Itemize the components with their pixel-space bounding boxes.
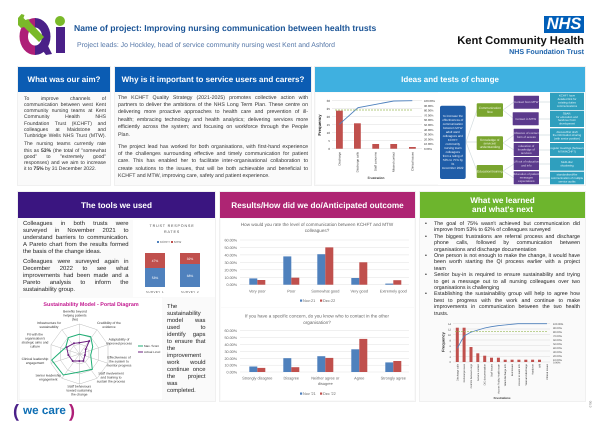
- pareto chart: second survey frustrations: Frequency: [440, 331, 446, 352]
- driver: aim box: effectiveness of: [442, 118, 463, 122]
- pareto chart: first survey frustrations: 30.00%: [424, 133, 434, 137]
- text: tools: improvements had been made and a: [23, 273, 128, 279]
- pareto chart: second survey frustrations: 0: [450, 361, 452, 364]
- text: sustainability: to ensure that: [167, 338, 206, 344]
- bar chart: rating of communication: 60.00%: [224, 238, 238, 242]
- heading: why important: [115, 67, 311, 92]
- pareto chart: second survey frustrations: 12: [448, 328, 452, 332]
- driver: primary drivers: Knowledge of: [480, 138, 500, 142]
- bar chart: rating of communication: 30.00%: [224, 261, 238, 265]
- radar chart: sustainability model: Senior leadership: [35, 374, 61, 378]
- bar chart: rating of communication: Somewhat good: [311, 288, 339, 294]
- radar chart: sustainability model: the change: [71, 392, 88, 396]
- text: learning bullets: The goal of 75% wasn't achieved but communication did: [434, 221, 580, 227]
- pareto chart: second survey frustrations: Wait and discharge: [525, 363, 528, 385]
- driver: change ideas: development: [559, 122, 575, 126]
- driver: aim box: KCHFT: [448, 138, 458, 142]
- pareto chart: first survey frustrations: 10: [327, 131, 330, 135]
- bar chart: rating of communication: 0.00%: [227, 283, 238, 287]
- pareto chart: second survey frustrations: Discharge calls: [456, 363, 459, 381]
- pareto chart: second survey frustrations: 30.00%: [553, 351, 562, 354]
- text: sustainability: the project: [167, 374, 206, 380]
- pareto chart: first survey frustrations: 50.00%: [424, 123, 434, 127]
- text: aim: Tunbridge Wells NHS Trust (MTW).: [24, 133, 106, 139]
- text: aim: The nursing teams currently rate: [24, 141, 106, 147]
- right bracket: ): [69, 401, 75, 421]
- NHS lozenge: NHS: [547, 15, 581, 33]
- pareto chart: first survey frustrations: 0: [328, 147, 330, 151]
- driver: secondary drivers: services: [521, 151, 532, 155]
- text: aim: it to 75% by 31 December 2022.: [24, 166, 96, 172]
- driver: aim box: December 2022: [442, 166, 464, 170]
- bar chart: rating of communication: Extremely good: [380, 288, 407, 294]
- radar chart: sustainability model: (Ns): [72, 318, 78, 322]
- bar chart: who to contact: Agree: [354, 376, 364, 380]
- pareto chart: first survey frustrations: Discharge calls: [355, 152, 359, 172]
- radar chart: sustainability model: monitor progress: [107, 364, 132, 368]
- radar chart: sustainability model: Infrastructure for: [37, 321, 62, 325]
- logo: QI: [18, 14, 65, 55]
- bar chart: rating of communication: 50.00%: [224, 246, 238, 250]
- pareto chart: first survey frustrations: 15: [327, 123, 330, 127]
- text: why important: health; embracing technology and health analytics; delivering services more: [118, 117, 308, 123]
- pareto chart: second survey frustrations: 2: [450, 356, 452, 359]
- pareto chart: first survey frustrations: 100.00%: [424, 99, 436, 103]
- driver: secondary drivers: form of access: [517, 135, 536, 139]
- radar chart: sustainability model: sustainability: [40, 325, 59, 329]
- pareto chart: first survey frustrations: 5: [328, 139, 330, 143]
- radar chart: sustainability model: Credibility of the: [97, 321, 121, 325]
- stacked bar chart: trust response rates: SURVEY 2: [181, 290, 199, 294]
- heading: what we learned: [420, 192, 585, 218]
- text: sustainability: improvement: [167, 352, 201, 358]
- pareto chart: second survey frustrations: Clinical issues: [546, 363, 549, 380]
- text: sustainability: completed.: [167, 388, 196, 394]
- pareto chart: second survey frustrations: Staff issues: [490, 363, 494, 377]
- radar chart: sustainability model: Fit with the: [27, 332, 43, 336]
- text: why important: [118, 95, 308, 179]
- text: sustainability: the: [167, 346, 175, 352]
- driver: aim box: adult ward: [446, 130, 460, 134]
- title: Name of project: Improving nursing communication between health trusts: [74, 23, 376, 33]
- bar chart: who to contact: 10.00%: [224, 364, 238, 368]
- pareto chart: second survey frustrations: Handover: [532, 364, 535, 375]
- radar chart: sustainability model: Actual Level: [144, 350, 161, 354]
- text: tools: sustainability group.: [23, 287, 75, 293]
- text: learning bullets: best to progress with the work and continue to make: [434, 298, 580, 304]
- bar chart: rating of communication: Nov-21: [303, 299, 315, 303]
- text: tools: Colleagues were surveyed again in: [23, 259, 128, 265]
- bar chart: who to contact: 60.00%: [224, 329, 238, 333]
- driver: aim box: To increase the: [443, 114, 463, 118]
- text: learning bullets: organisations and discharge documentation: [434, 247, 536, 253]
- pareto chart: second survey frustrations: 100.00%: [553, 323, 564, 326]
- pareto chart: first survey frustrations: Clinical issues: [410, 152, 414, 171]
- text: sustainability: The: [167, 304, 177, 310]
- text: learning bullets: been worth starting the QI process earlier with a project: [434, 259, 580, 265]
- pareto chart: second survey frustrations: 70.00%: [553, 335, 562, 338]
- project leads: Project leads: Jo Hockley, head of service community nursing west Kent and Ashford: [77, 42, 335, 49]
- radar chart: sustainability model: Staff behaviours: [67, 384, 92, 388]
- we care wordmark: we care: [23, 404, 66, 417]
- driver: change ideas: standardised/the: [557, 172, 578, 176]
- driver: change ideas: the information sharing: [553, 133, 582, 137]
- text: why important: delivering more proactive approaches to health care and prevention of ill-: [118, 109, 308, 115]
- driver: change ideas: SBAR:: [563, 112, 571, 116]
- driver: change ideas: [550, 93, 584, 184]
- driver: secondary drivers: messages: [520, 176, 533, 180]
- pareto chart: second survey frustrations: 10: [448, 334, 452, 337]
- driver: primary drivers: Education/training: [477, 170, 503, 174]
- text: aim: responses) and we aim to increase: [24, 160, 106, 166]
- pareto chart: second survey frustrations: 50.00%: [553, 343, 562, 346]
- bar chart: who to contact: 40.00%: [224, 343, 238, 347]
- heading: tools: The tools we used: [81, 200, 152, 210]
- pareto chart: second survey frustrations: 80.00%: [553, 331, 562, 334]
- NHS logo: [457, 15, 584, 56]
- radar chart: sustainability model: and training to: [101, 376, 122, 380]
- text: sustainability: identify gaps: [167, 332, 206, 338]
- pareto chart: second survey frustrations: 0.00%: [553, 362, 561, 364]
- text: why important: The KCHFT Quality Strategy (2021-2025) promotes collective action with: [118, 95, 308, 101]
- bar chart: who to contact: Nov '21: [303, 392, 316, 396]
- text: why important: efficiently across the system; and focusing on workforce through the People: [118, 124, 308, 130]
- driver: secondary drivers: expectations: [518, 179, 535, 183]
- pareto chart: second survey frustrations: Referral process: [463, 363, 466, 382]
- bar chart: who to contact: If you have a specific concern, do you know who to contact in the other: [245, 314, 389, 318]
- driver: change ideas: KCHFT have: [559, 94, 575, 98]
- radar chart: sustainability model: Staff involvement: [98, 372, 124, 376]
- text: aim: this as 53% (the total of "somewhat: [24, 148, 106, 154]
- pareto chart: first survey frustrations: [317, 99, 436, 180]
- text: why important: The project lead has worked for both organisations, with first-hand experience: [118, 144, 308, 150]
- text: aim: Community Health NHS: [24, 114, 106, 120]
- stacked bar chart: trust response rates: SURVEY 1: [146, 290, 164, 294]
- driver: aim box: [440, 106, 466, 179]
- stacked bar chart: trust response rates: MTW: [174, 240, 181, 244]
- pareto chart: second survey frustrations: 8: [450, 340, 452, 342]
- driver: aim box: nursing team: [444, 146, 462, 150]
- driver: change ideas: handover form: [558, 118, 577, 122]
- text: tools: Pareto analysis to inform the: [23, 280, 128, 286]
- bar chart: who to contact: 50.00%: [224, 336, 238, 340]
- radar chart: sustainability model: evidence: [102, 325, 116, 329]
- radar chart: sustainability model: improved process: [106, 342, 132, 346]
- text: learning bullets: improvements in communication between the two health: [434, 304, 580, 310]
- pareto chart: second survey frustrations: Access Frailty Health team: [497, 364, 500, 394]
- pareto chart: second survey frustrations: Access to team info: [518, 363, 521, 386]
- pareto chart: first survey frustrations: Frustration: [368, 176, 384, 180]
- pareto chart: second survey frustrations: Comms between orgs: [470, 363, 473, 388]
- pareto chart: second survey frustrations: Frustrations: [494, 396, 511, 400]
- stacked bar chart: trust response rates: 53%: [152, 276, 158, 280]
- text: learning bullets: The biggest frustrations are referral process and discharge: [434, 234, 580, 240]
- driver: primary drivers: Communication: [479, 106, 501, 110]
- pareto chart: second survey frustrations: 4: [450, 350, 452, 354]
- driver: change ideas: service audits: [558, 180, 576, 184]
- stacked bar chart: trust response rates: TRUST RESPONSE: [150, 224, 194, 228]
- driver: secondary drivers: Absence of contact: [514, 131, 539, 135]
- pareto chart: first survey frustrations: 20: [327, 115, 330, 119]
- panel: results: [220, 192, 415, 401]
- driver: aim box: community: [446, 142, 461, 146]
- pareto chart: second survey frustrations: Service contact: [477, 364, 480, 381]
- pareto chart: second survey frustrations: 10.00%: [553, 359, 562, 362]
- bar chart: who to contact: disagree: [318, 381, 333, 386]
- driver: change ideas: (with senior position): [554, 136, 580, 140]
- text: learning bullets: team: [434, 266, 446, 272]
- document reference: 0700: [588, 401, 592, 407]
- driver: change ideas: Multi-disc: [561, 160, 574, 164]
- text: learning bullets: to get a message out to all nursing colleagues over two: [434, 279, 580, 285]
- radar chart: sustainability model: organisation's: [25, 336, 45, 340]
- stacked bar chart: trust response rates: 68%: [187, 274, 193, 278]
- heading: what we learned: and what's next: [472, 205, 533, 214]
- panel: tools we used: [18, 192, 215, 401]
- text: aim: Foundation Trust (KCHFT) and: [24, 121, 106, 127]
- driver: secondary drivers: Lift out of education: [514, 160, 539, 164]
- pareto chart: second survey frustrations: Bed issues: [511, 363, 514, 376]
- text: why important: KCHFT and MTW, improving care, safety and patient experience.: [118, 173, 270, 179]
- bar chart: who to contact: 0.00%: [227, 370, 238, 374]
- left bracket: (: [13, 401, 19, 421]
- heading: results: [220, 192, 415, 218]
- we care logo: [13, 401, 75, 421]
- panel: aim: [18, 67, 110, 185]
- pareto chart: first survey frustrations: 70.00%: [424, 113, 434, 117]
- pareto chart: first survey frustrations: Discharge: [337, 152, 341, 166]
- driver: secondary drivers: Education of patient: [514, 172, 539, 176]
- text: sustainability: [167, 304, 206, 394]
- bar chart: who to contact: Strongly agree: [381, 376, 406, 380]
- driver: secondary drivers: education of: [518, 144, 534, 148]
- bar chart: rating of communication: Poor: [287, 288, 296, 294]
- bar chart: rating of communication: colleagues?: [305, 228, 330, 233]
- radar chart: sustainability model: Sustainability Model - Portal Diagram: [43, 302, 139, 308]
- driver: change ideas: detailed link for: [558, 97, 576, 101]
- bar chart: rating of communication: Dec-22: [323, 299, 335, 303]
- driver: secondary drivers: Contact from MTW: [514, 100, 539, 104]
- text: tools: A Pareto chart from the results formed: [23, 242, 128, 248]
- heading: why important: Why is it important to service users and carers?: [122, 75, 304, 84]
- stacked bar chart: trust response rates: KCHFT: [160, 240, 170, 244]
- text: sustainability: continue once: [167, 366, 206, 372]
- bar chart: who to contact: Strongly disagree: [242, 376, 272, 380]
- radar chart: sustainability model: Clinical leadership: [22, 357, 49, 361]
- stacked bar chart: trust response rates: 32%: [187, 257, 193, 261]
- driver diagram: [440, 92, 584, 184]
- driver: aim box: colleagues and: [443, 134, 463, 138]
- radar chart: sustainability model: the system to: [109, 360, 129, 364]
- heading: aim: [18, 67, 110, 92]
- bar chart: who to contact: Dec '22: [323, 392, 336, 396]
- text: learning bullets: [425, 221, 580, 317]
- pareto chart: second survey frustrations: Will: [538, 364, 542, 368]
- pareto chart: second survey frustrations: [440, 323, 564, 400]
- bar chart: who to contact: Disagree: [284, 376, 299, 380]
- stacked bar chart: trust response rates: [145, 224, 200, 294]
- pareto chart: second survey frustrations: 20.00%: [553, 355, 562, 358]
- text: why important: Plan.: [118, 132, 130, 138]
- bar chart: rating of communication: Very poor: [249, 288, 266, 294]
- pareto chart: second survey frustrations: 6: [450, 345, 452, 348]
- foundation trust: NHS Foundation Trust: [509, 48, 584, 56]
- pareto chart: second survey frustrations: 40.00%: [553, 347, 562, 350]
- text: learning bullets: organisations is challenging: [434, 285, 499, 291]
- bar chart: rating of communication: 20.00%: [224, 268, 238, 272]
- stacked bar chart: trust response rates: RATES: [164, 230, 180, 234]
- text: why important: of the challenges surrounding effective and timely communication for patient: [118, 151, 308, 157]
- driver: change ideas: discuss/first draft: [557, 130, 578, 134]
- pareto chart: second survey frustrations: 14: [448, 323, 452, 326]
- text: aim: [24, 96, 106, 172]
- pareto chart: first survey frustrations: 0.00%: [424, 147, 432, 151]
- text: aim: colleagues at Maidstone and: [24, 127, 106, 133]
- text: tools: understand barriers to communication.: [23, 235, 128, 241]
- text: sustainability: work would: [167, 360, 206, 366]
- driver: secondary drivers: and info: [521, 164, 532, 168]
- pareto chart: first survey frustrations: 30: [327, 99, 330, 103]
- pareto chart: first survey frustrations: 25: [327, 107, 330, 111]
- text: learning bullets: Senior buy-in is required to ensure sustainability and trying: [434, 272, 580, 278]
- text: tools: the basis of the change ideas.: [23, 249, 101, 255]
- text: aim: good" to "extremely good": [24, 154, 106, 160]
- panel: what we learned: [420, 192, 585, 401]
- pareto chart: second survey frustrations: 60.00%: [553, 339, 562, 342]
- radar chart: sustainability model: Max. Score: [144, 344, 160, 348]
- heading: results: Results/How did we do/Anticipated outcome: [231, 200, 404, 210]
- stacked bar chart: trust response rates: 47%: [152, 259, 158, 263]
- bar chart: who to contact: 30.00%: [224, 350, 238, 354]
- radar chart: sustainability model: helping patients: [63, 314, 87, 318]
- radar chart: sustainability model: [19, 297, 163, 400]
- heading: what we learned: What we learned: [470, 196, 535, 204]
- panel: ideas and tests of change: [315, 67, 585, 185]
- radar chart: sustainability model: culture: [30, 344, 40, 348]
- driver: secondary drivers: knowledge of: [518, 148, 535, 152]
- driver: aim box: 53% to 75% by: [443, 158, 463, 162]
- driver: change ideas: existing duties: [558, 100, 576, 104]
- text: learning bullets: improve from 53% to 62% of colleagues surveyed: [434, 227, 551, 233]
- heading: aim: What was our aim?: [28, 75, 100, 84]
- text: tools: December 2022 to see what: [23, 266, 128, 272]
- pareto chart: first survey frustrations: Missed contact: [392, 152, 396, 172]
- radar chart: sustainability model: engagement: [39, 378, 58, 382]
- text: tools: surveyed in November 2021 to: [23, 228, 128, 234]
- driver: aim box: 31: [451, 162, 455, 166]
- bar chart: rating of communication: Very good: [351, 288, 368, 294]
- radar chart: sustainability model: engagement: [26, 361, 44, 365]
- heading: tools: [18, 192, 215, 218]
- heading: ideas: [315, 67, 585, 92]
- driver: aim box: communication: [443, 122, 463, 126]
- pareto chart: first survey frustrations: 40.00%: [424, 128, 434, 132]
- radar chart: sustainability model: Adaptability of: [109, 338, 129, 342]
- text: why important: care. This has enabled her to facilitate inter-organisational collaboration to: [118, 158, 308, 164]
- bar chart: who to contact: 20.00%: [224, 357, 238, 361]
- bar chart: rating of communication: 40.00%: [224, 253, 238, 257]
- driver: primary drivers: services/: [484, 142, 496, 146]
- driver: change ideas: communication of multiple: [551, 176, 584, 180]
- bar chart: rating of communication: [224, 222, 409, 303]
- text: aim: To improve channels of: [24, 96, 106, 102]
- driver: aim box: between MTW: [443, 126, 463, 130]
- pareto chart: first survey frustrations: 60.00%: [424, 118, 434, 122]
- driver: aim box: from a rating of: [443, 154, 463, 158]
- text: learning bullets: Establishing the sustainability group will help to agree how: [434, 291, 580, 297]
- driver: change ideas: for education and: [556, 115, 578, 119]
- pareto chart: first survey frustrations: 90.00%: [424, 104, 434, 108]
- driver: change ideas: MTW/KCHFT): [558, 150, 576, 154]
- bar chart: rating of communication: 10.00%: [224, 276, 238, 280]
- driver: secondary drivers: Contact in MTW: [515, 117, 536, 121]
- driver: change ideas: shadowing: [560, 164, 574, 168]
- text: learning bullets: One person is not enough to make the change, it would have: [434, 253, 580, 259]
- text: learning bullets: phone calls, followed by communication between: [434, 240, 580, 246]
- heading: ideas: Ideas and tests of change: [401, 75, 499, 84]
- radar chart: sustainability model: sustain the process: [97, 380, 126, 384]
- bar chart: who to contact: [224, 314, 409, 396]
- text: tools: Colleagues in both trusts were: [23, 221, 128, 227]
- radar chart: sustainability model: toward sustaining: [66, 388, 92, 392]
- pareto chart: first survey frustrations: Frequency: [317, 114, 322, 136]
- text: sustainability: used to: [167, 324, 206, 330]
- text: tools: [23, 220, 129, 293]
- bar chart: who to contact: Neither agree or: [311, 376, 340, 380]
- text: sustainability: was: [167, 380, 177, 386]
- text: learning bullets: trusts.: [434, 311, 448, 317]
- bar chart: rating of communication: How would you rate the level of communication between KCHFT and MTW: [241, 222, 394, 227]
- pareto chart: second survey frustrations: D/C documentation: [484, 363, 487, 385]
- driver: change ideas: regular meetings (between: [550, 146, 584, 150]
- driver: secondary drivers: [513, 96, 539, 184]
- pareto chart: second survey frustrations: 90.00%: [553, 327, 562, 330]
- panel: why important: [115, 67, 311, 185]
- driver: primary drivers: [477, 103, 503, 178]
- organisation name: Kent Community Health: [457, 35, 584, 47]
- pareto chart: first survey frustrations: 10.00%: [424, 142, 434, 146]
- radar chart: sustainability model: Benefits beyond: [63, 310, 87, 314]
- text: aim: communication between west Kent: [24, 102, 106, 108]
- driver: change ideas: communications: [557, 104, 578, 108]
- pareto chart: first survey frustrations: 20.00%: [424, 137, 434, 141]
- bar chart: who to contact: organisation?: [303, 320, 331, 325]
- text: aim: community nursing teams at Kent: [24, 108, 106, 114]
- pareto chart: first survey frustrations: 80.00%: [424, 109, 434, 113]
- driver: primary drivers: flow: [487, 110, 493, 114]
- radar chart: sustainability model: Effectiveness of: [107, 356, 131, 360]
- pareto chart: first survey frustrations: Staff concerns: [374, 152, 378, 171]
- driver: aim box: colleagues: [446, 150, 460, 154]
- text: sustainability: model was: [167, 318, 206, 324]
- text: why important: partners to deliver the ambitions of the NHS Long Term Plan. These centre on: [118, 102, 308, 108]
- text: why important: create solutions to the issues, that will be both achievable and beneficial to: [118, 166, 308, 172]
- text: sustainability: sustainability: [167, 310, 201, 316]
- radar chart: sustainability model: strategic aims and: [22, 340, 49, 344]
- pareto chart: second survey frustrations: Ward discharge info: [504, 363, 507, 386]
- driver: primary drivers: understanding: [480, 145, 500, 149]
